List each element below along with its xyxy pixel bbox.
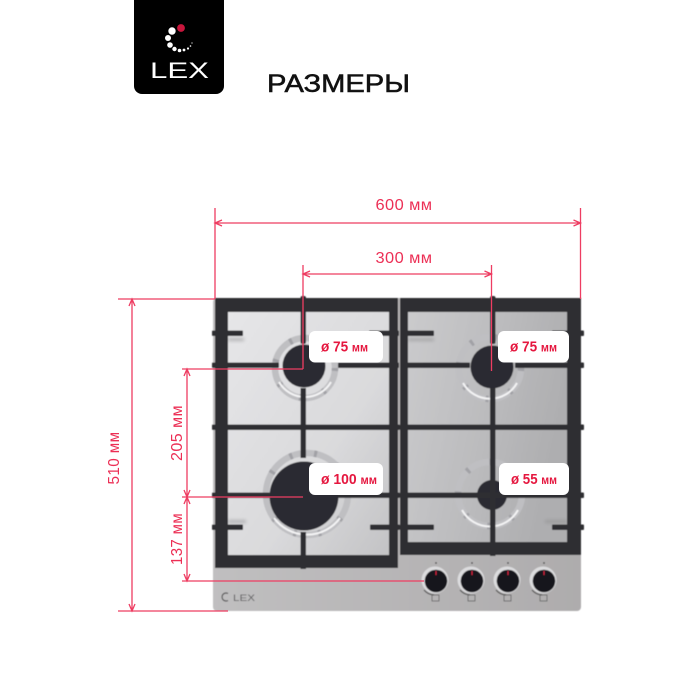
burner rear right xyxy=(459,337,521,399)
dimension: burner spacing 300 mm: 300 мм xyxy=(376,250,432,267)
dimension: depth 510 mm xyxy=(106,299,228,611)
label: front left burner 100 mm xyxy=(309,463,383,495)
label: rear left burner 75 mm: ø 75 мм xyxy=(321,338,368,356)
dimension: width 600 mm xyxy=(215,197,580,299)
burner rear left xyxy=(275,338,335,398)
label: front right burner 55 mm: ø 55 мм xyxy=(511,471,557,488)
dimension: 137 mm: 137 мм xyxy=(169,513,186,565)
dimension: depth 510 mm: 510 мм xyxy=(106,432,123,484)
left steel surface xyxy=(226,310,391,558)
burner front right xyxy=(458,462,522,527)
right steel surface xyxy=(406,310,569,544)
label: rear left burner 75 mm xyxy=(309,331,383,362)
cooktop xyxy=(212,296,584,611)
knob 3 xyxy=(494,562,520,601)
steel plate xyxy=(213,298,581,611)
logo wordmark: LEX xyxy=(150,58,209,83)
knob 2 xyxy=(458,562,484,601)
label: rear right burner 75 mm: ø 75 мм xyxy=(510,338,557,356)
title: РАЗМЕРЫ xyxy=(267,70,410,98)
knob 1 xyxy=(422,562,448,601)
logo xyxy=(134,0,224,94)
dimension: 205 mm: 205 мм xyxy=(169,405,186,461)
dimension: 137 mm xyxy=(169,497,424,581)
logo mark: dotted circle xyxy=(165,24,193,52)
right grate xyxy=(400,296,584,556)
brand mark on panel: LEX xyxy=(233,593,255,603)
knob 4 xyxy=(530,562,556,601)
label: rear right burner 75 mm xyxy=(498,331,569,362)
dimension: width 600 mm: 600 мм xyxy=(376,197,432,214)
left grate xyxy=(212,296,400,569)
bar shadows xyxy=(228,338,567,523)
brand mark on panel xyxy=(222,593,255,603)
dimension: burner spacing 300 mm xyxy=(303,250,492,371)
label: front right burner 55 mm xyxy=(499,463,569,495)
label: front left burner 100 mm: ø 100 мм xyxy=(321,471,377,488)
burner front left xyxy=(266,453,348,535)
dimension: 205 mm xyxy=(169,369,303,497)
